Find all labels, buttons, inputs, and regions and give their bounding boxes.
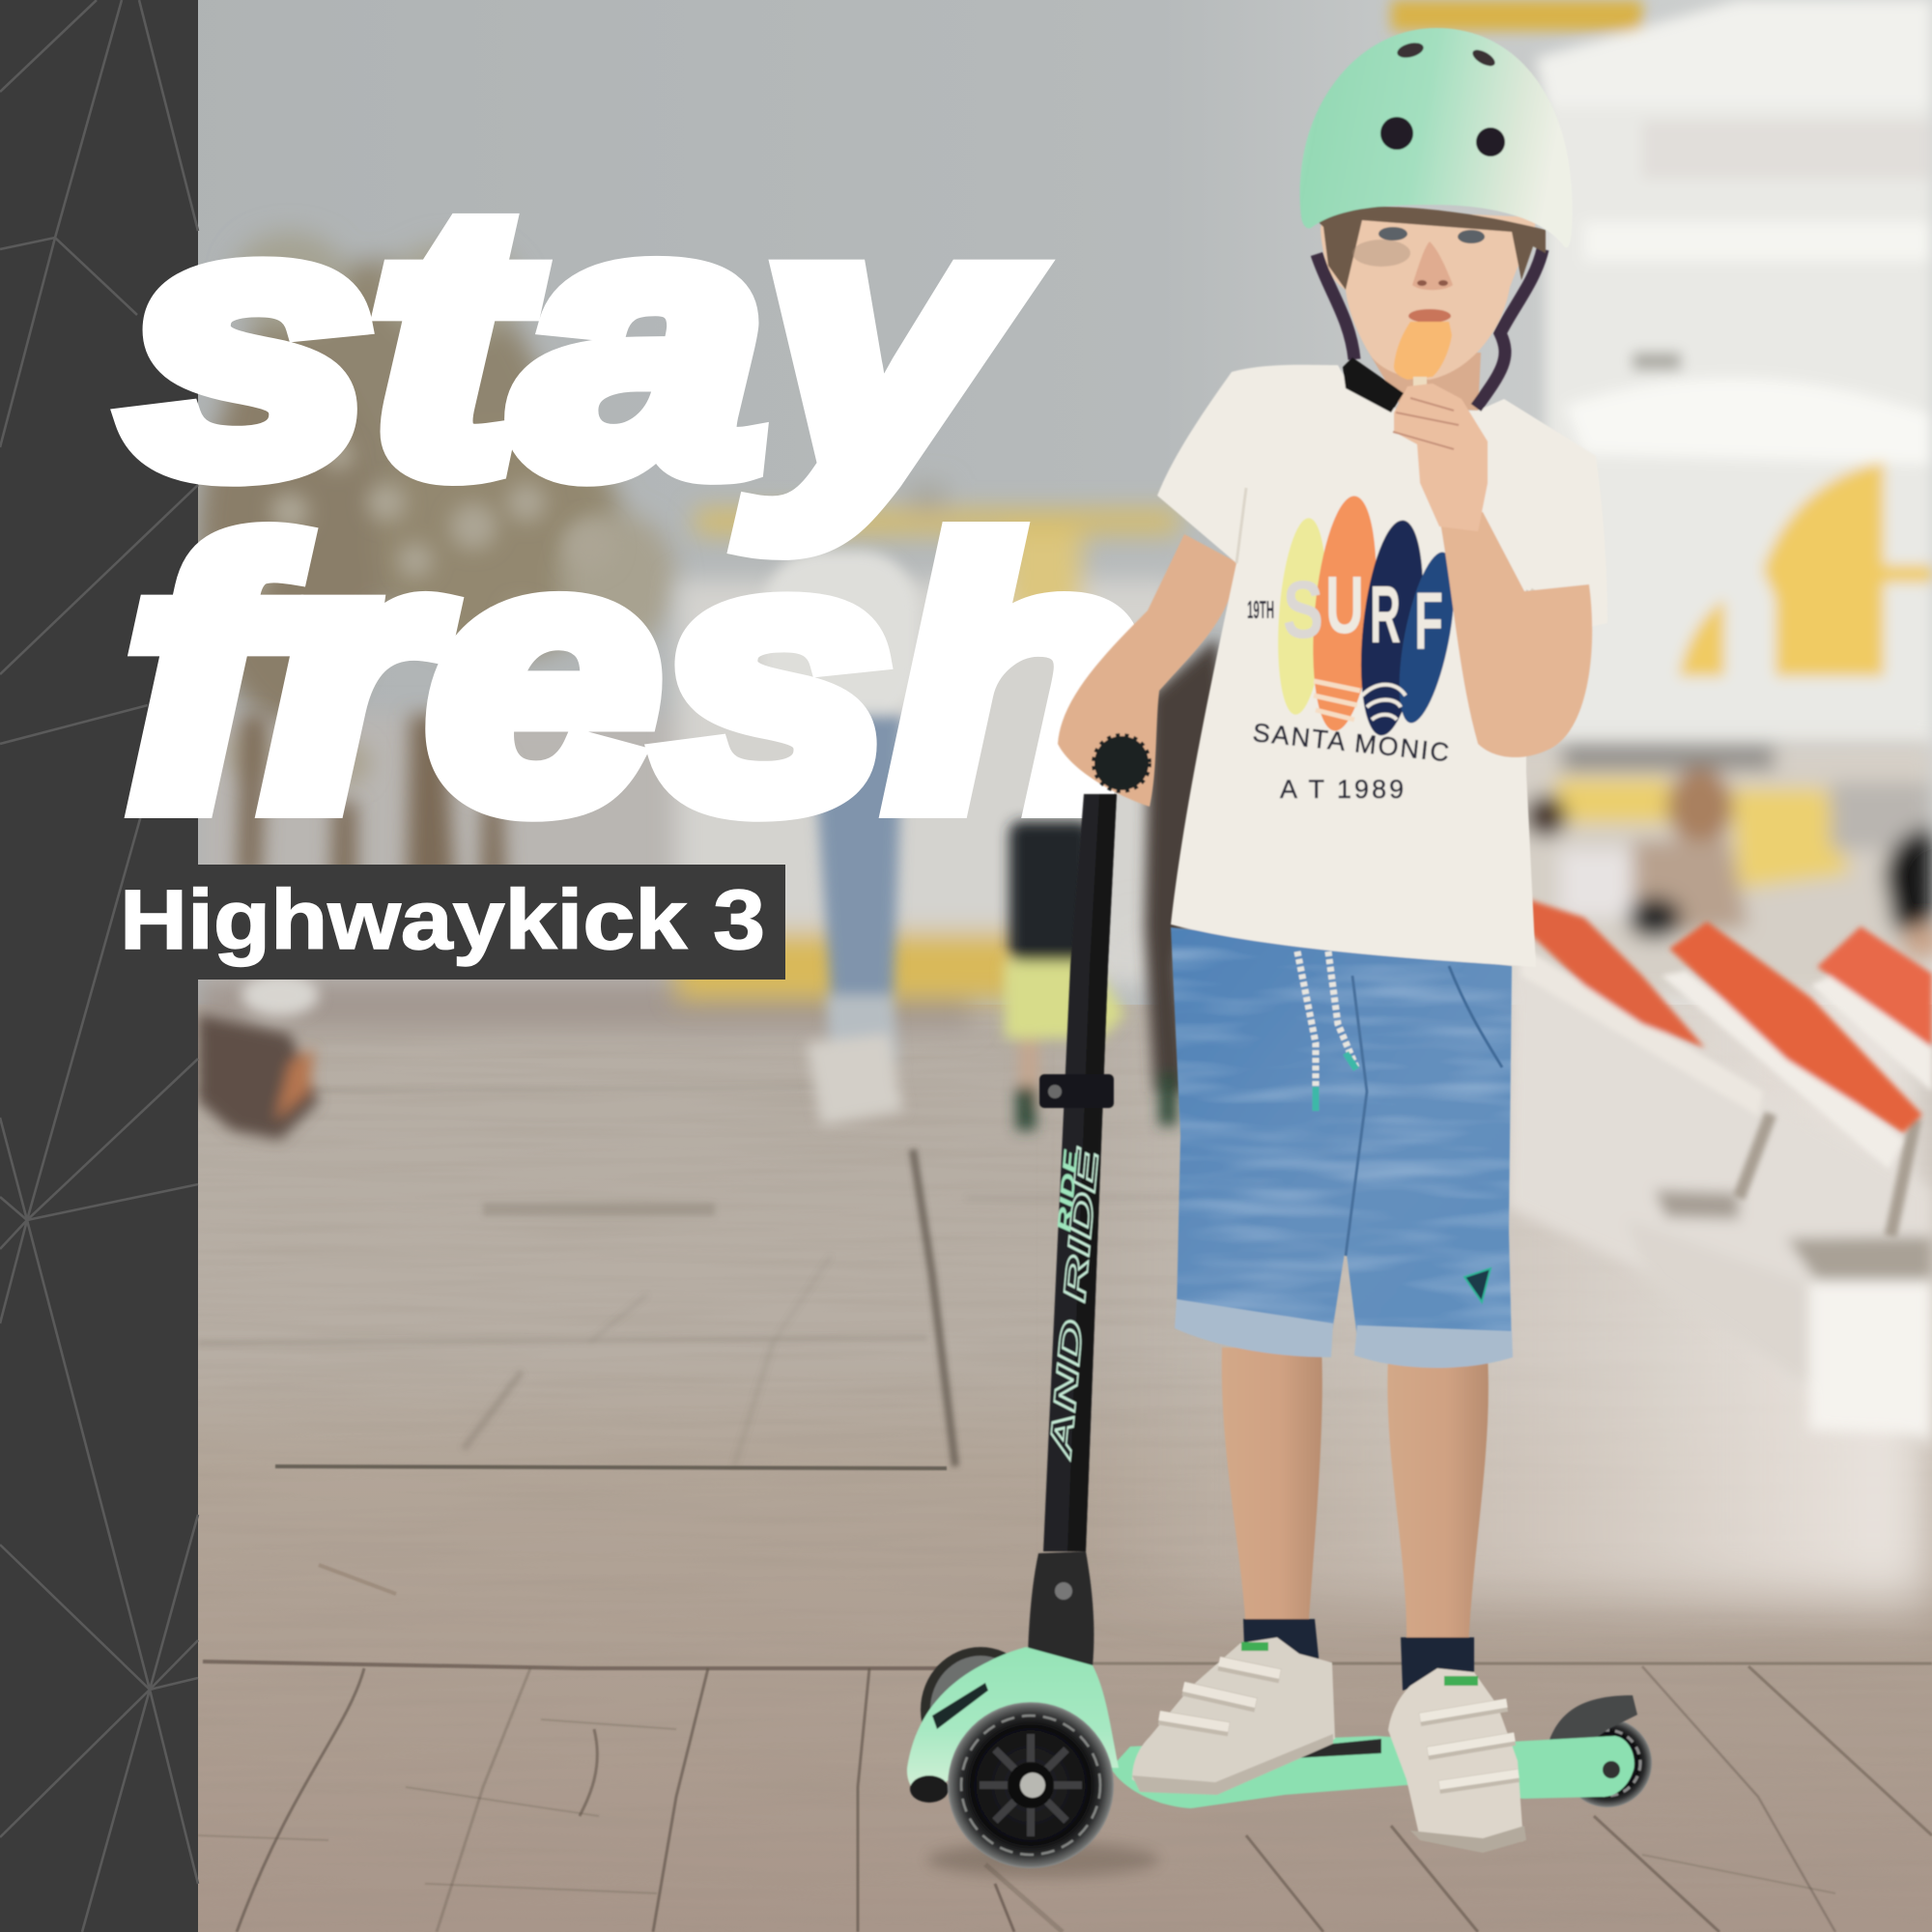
scooter deck and body (907, 1647, 1634, 1808)
title line: fresh: fresh (128, 468, 1144, 884)
stem socket (1028, 1551, 1094, 1666)
chin buckle (1343, 357, 1404, 412)
mouth (1408, 309, 1451, 323)
helmet vents (1380, 117, 1413, 150)
rolled hem right (1354, 1325, 1513, 1368)
shirt print text: S (1283, 564, 1323, 655)
helmet straps (1317, 249, 1543, 408)
left arm holding the handle (1058, 534, 1238, 807)
seated terrace area (1507, 744, 1932, 995)
blurred white building on the right (1391, 0, 1932, 744)
denim shorts (1171, 927, 1513, 1368)
light floor on the right (1063, 927, 1932, 1604)
shirt print text: F (1414, 576, 1443, 667)
surfboards graphic (1272, 494, 1465, 739)
front fender (907, 1647, 1119, 1795)
drawstrings (1297, 952, 1356, 1111)
scooter rear wheel (1546, 1695, 1652, 1807)
face (1321, 208, 1536, 380)
blurred loungers frame legs (1739, 1114, 1916, 1236)
wheel shadow (927, 1842, 1159, 1877)
grip (1094, 736, 1149, 790)
shirt print text: SANTA MONIC (1251, 718, 1452, 768)
mint helmet (1300, 28, 1573, 247)
clamp (1039, 1074, 1114, 1108)
tree bokeh highlights (226, 439, 614, 796)
floor plank joints (198, 1087, 1507, 1466)
blurred pedestrians (763, 551, 1227, 1130)
hair (1311, 207, 1546, 290)
sneakers (1132, 1637, 1526, 1853)
blurred tree trunks (238, 715, 506, 889)
blurred building in the distance (676, 483, 1179, 1000)
floor wood grain (198, 1005, 1932, 1932)
eyes (1352, 240, 1410, 267)
title line: stay: stay (126, 132, 1033, 551)
blurred tree crown (198, 232, 676, 724)
shirt print text: U (1325, 559, 1364, 650)
shirt print text: A T 1989 (1280, 775, 1406, 804)
rolled hem left (1175, 1299, 1333, 1357)
geometric line pattern (0, 0, 198, 1932)
scooter handlebar and stem (1028, 736, 1149, 1666)
subtitle text: Highwaykick 3 (120, 873, 765, 967)
right arm and hand (1393, 384, 1592, 757)
scooter front wheel (948, 1702, 1114, 1868)
shorts badge (1464, 1268, 1491, 1302)
nose (1412, 242, 1453, 290)
popsicle (1394, 322, 1452, 380)
socks (1243, 1619, 1474, 1690)
distant wall (198, 715, 971, 1029)
shirt print text: R (1370, 569, 1401, 660)
title: stay fresh (126, 132, 1144, 884)
sharp wooden planks in the foreground (198, 1466, 1932, 1932)
scooter second front wheel (921, 1647, 1040, 1773)
stem lettering: AND RIDE (1042, 1145, 1105, 1462)
denim wash texture (1171, 927, 1512, 1352)
background wall and sky (0, 0, 1932, 1005)
boy on scooter (907, 28, 1652, 1868)
dark tree base (198, 974, 319, 1140)
legs (1222, 1348, 1489, 1647)
shirt print text (1247, 559, 1452, 804)
blurred orange sun loungers (1521, 899, 1932, 1169)
t-shirt (1157, 365, 1607, 967)
neck (1369, 353, 1481, 411)
stem lettering: RIDE (1054, 1149, 1082, 1233)
stem lettering (1042, 1145, 1105, 1462)
blurred white planters (1507, 942, 1932, 1449)
shirt print text: 19TH (1247, 595, 1274, 624)
subtitle badge: Highwaykick 3 (120, 865, 785, 980)
head (1311, 207, 1546, 412)
panel: dark geometric sidebar (0, 0, 198, 1932)
